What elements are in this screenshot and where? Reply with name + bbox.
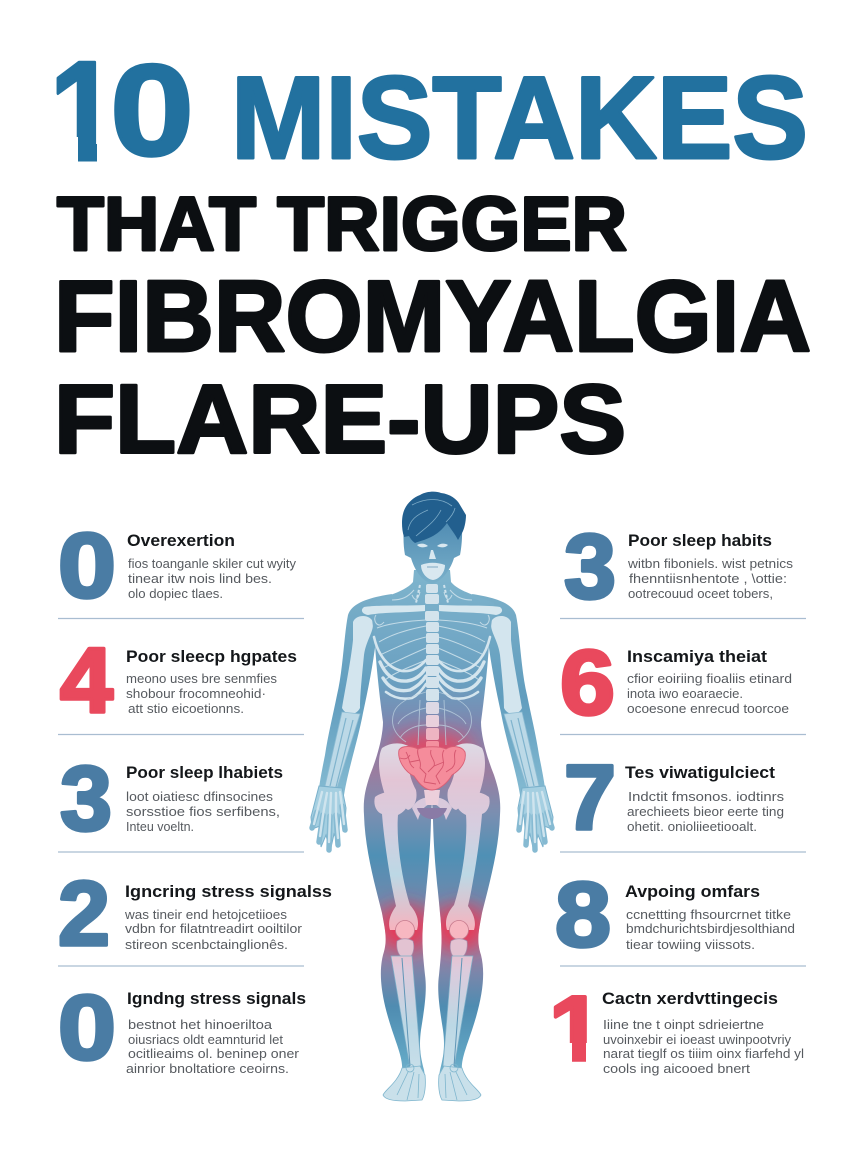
body text: [124, 907, 303, 952]
body text: inota iwo eoaraecie.: [627, 686, 743, 701]
item: right 5: [554, 992, 804, 1076]
foot: [383, 1066, 425, 1101]
thin upper ribs: [375, 590, 426, 680]
item: left 5: [58, 977, 306, 1079]
body text: sorsstioe fios serfibens,: [126, 804, 280, 819]
body text: witbn fiboniels. wist petnics: [627, 556, 794, 571]
body text: stireon scenbctainglionês.: [125, 937, 288, 952]
lower leg bones: [391, 956, 421, 1068]
body text: [126, 671, 278, 716]
number 0: 0: [58, 977, 116, 1079]
pelvis wing: [379, 743, 417, 810]
item: right 4: [555, 864, 795, 966]
body text: [126, 1017, 300, 1076]
hand: [311, 786, 346, 852]
body text: arechieets bieor eerte ting: [627, 804, 784, 819]
title line: 10 mistakes: MISTAKES: [231, 52, 808, 183]
clavicle: [362, 605, 425, 615]
body text: [626, 907, 795, 952]
title: [56, 60, 810, 455]
item: right 1: [564, 516, 794, 618]
body text: [627, 671, 792, 716]
body text: att stio eicoetionns.: [128, 701, 244, 716]
body text: ocitlieaims ol. beninep oner: [128, 1046, 300, 1061]
body text: shobour frocomneohid·: [126, 686, 266, 701]
number 3: 3: [564, 516, 616, 618]
body text: fios toanganle skiler cut wyity: [128, 556, 296, 571]
body text: [627, 789, 785, 834]
item: left 2: [60, 630, 297, 732]
body text: Iiine tne t oinpt sdrieiertne: [603, 1017, 764, 1032]
arms and hands: [311, 594, 553, 852]
sacrum: [424, 790, 440, 805]
spine: [425, 584, 439, 753]
item: left 1: [58, 515, 296, 617]
body text: ainrior bnoltatiore ceoirns.: [126, 1061, 289, 1076]
heading: Poor sleep lhabiets: [126, 763, 283, 782]
upper tibia: [397, 939, 414, 957]
number 3: 3: [60, 748, 112, 850]
body text: Indctit fmsonos. iodtinrs: [628, 789, 785, 804]
abdominal outlines: [392, 692, 426, 745]
body text: cools ing aicooed bnert: [603, 1061, 750, 1076]
number 4: 4: [60, 630, 113, 732]
number 6: 6: [560, 632, 615, 734]
number 7: 7: [564, 747, 616, 849]
item: right 3: [564, 747, 785, 849]
left column dividers: [58, 618, 304, 966]
body text: olo dopiec tlaes.: [128, 586, 223, 601]
number 0: 0: [58, 515, 116, 617]
body text: loot oiatiesc dfinsocines: [126, 789, 274, 804]
body text: bestnot het hinoeriltoa: [128, 1017, 273, 1032]
body text: [627, 556, 794, 601]
heading: Overexertion: [127, 531, 235, 550]
body text: [128, 556, 296, 601]
heading: Igncring stress signalss: [125, 882, 332, 901]
heading: Cactn xerdvttingecis: [602, 989, 778, 1008]
face: [404, 509, 462, 584]
heading: Poor sleep habits: [628, 531, 772, 550]
femur: [374, 792, 418, 930]
heading: Poor sleecp hgpates: [126, 647, 297, 666]
item: right 2: [560, 632, 792, 734]
neck vertebrae side: [416, 585, 448, 603]
body text: cfior eoiriing fioaliis etinard: [627, 671, 792, 686]
kneecap: [396, 920, 414, 940]
body text: narat tieglf os tiiim oinx fiarfehd yl: [603, 1046, 804, 1061]
head: [402, 492, 466, 584]
skeleton: [362, 584, 502, 1101]
hair: [402, 492, 466, 543]
facial features: [417, 544, 448, 580]
body text: was tineir end hetojcetiioes: [124, 907, 288, 922]
item: left 4: [58, 863, 332, 965]
number 2: 2: [58, 863, 110, 965]
body text: uvoinxebir ei ioeast uwinpootvriy: [603, 1032, 792, 1047]
title line: flare-ups: FLARE-UPS: [54, 364, 626, 474]
human body figure: [311, 492, 553, 1101]
right column dividers: [560, 618, 806, 966]
body text: ootrecouud oceet tobers,: [628, 586, 773, 601]
body text: oiusriacs oldt eamnturid let: [128, 1032, 283, 1047]
body text: meono uses bre senmfies: [126, 671, 278, 686]
title line: 10 mistakes: 1: [50, 32, 118, 191]
torso and legs: [364, 570, 500, 1101]
title line: 10 mistakes: [56, 60, 805, 162]
forearm bones: [325, 712, 360, 788]
body text: [603, 1017, 804, 1076]
humerus: [342, 616, 373, 714]
body text: tinear itw nois lind bes.: [128, 571, 272, 586]
heading: Avpoing omfars: [625, 882, 760, 901]
body text: bmdchurichtsbirdjesolthiand: [626, 921, 795, 936]
title line: that trigger: THAT TRIGGER: [57, 182, 627, 267]
title line: fibromyalgia: FIBROMYALGIA: [54, 261, 811, 373]
body text: Inteu voeltn.: [126, 819, 194, 834]
body text: ohetit. onioliieetiooalt.: [627, 819, 757, 834]
body text: vdbn for filatntreadirt ooiltilor: [125, 921, 303, 936]
body text: ocoesone enrecud toorcoe: [627, 701, 789, 716]
red pain glows: [380, 734, 484, 949]
body text: [126, 789, 280, 834]
number 1: 1: [549, 978, 603, 1080]
pubic bone: [412, 797, 432, 820]
heading: Igndng stress signals: [127, 989, 306, 1008]
body text: ccnettting fhsourcrnet titke: [626, 907, 791, 922]
thick lower ribs: [374, 637, 426, 699]
intestines: [399, 746, 465, 790]
body text: tiear towiing viissots.: [626, 937, 755, 952]
body text: fhenntiisnhentote , \ottie:: [629, 571, 787, 586]
title line: 10 mistakes: 0: [110, 37, 194, 183]
heading: Inscamiya theiat: [627, 647, 767, 666]
number 8: 8: [555, 864, 611, 966]
item: left 3: [60, 748, 283, 850]
heading: Tes viwatigulciect: [625, 763, 775, 782]
